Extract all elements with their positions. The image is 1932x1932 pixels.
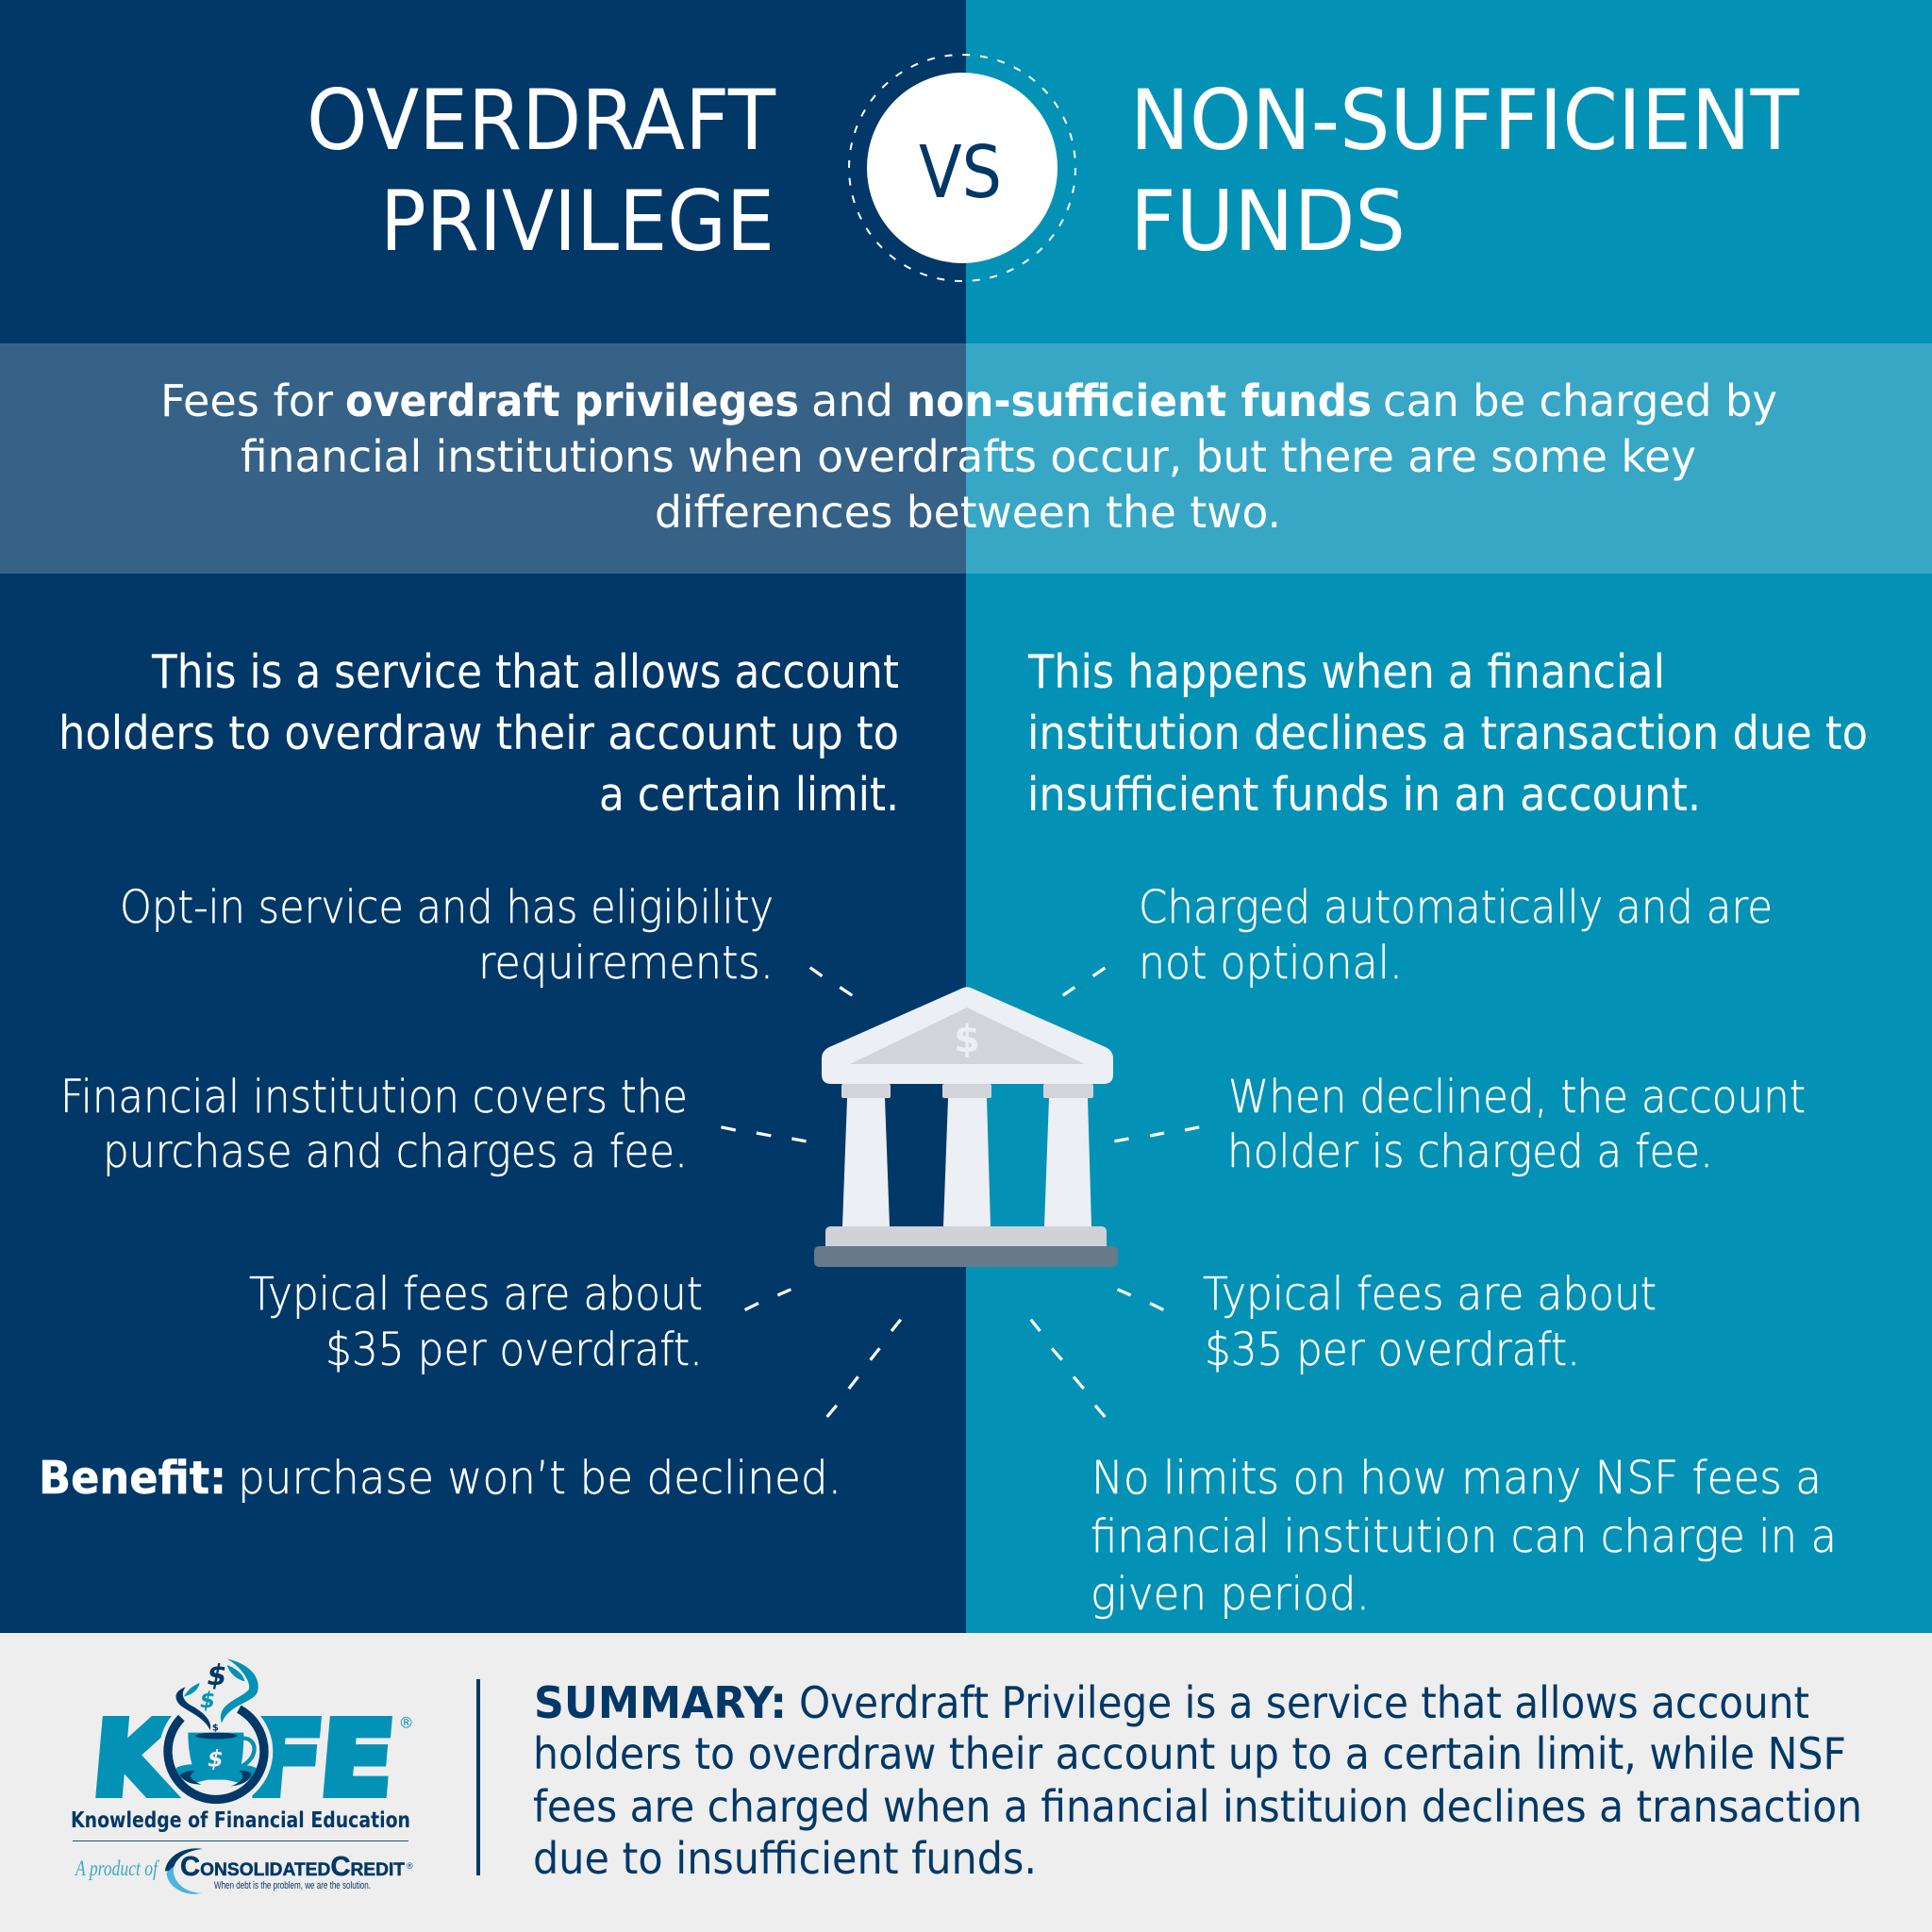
dashed connector lines: [721, 968, 1199, 1417]
summary text: Overdraft Privilege is a service that allows account: [799, 1677, 1809, 1728]
left point: typical fees: [249, 1268, 703, 1376]
logo: Consolidated Credit: CONSOLIDATEDCREDIT: [180, 1852, 405, 1882]
intro text: can be charged by: [1383, 375, 1777, 426]
left point: benefit: purchase won’t be declined.: [238, 1452, 841, 1505]
right point: declined fee: When declined, the account: [1228, 1071, 1806, 1124]
intro text: and: [811, 375, 893, 426]
panel: non-sufficient funds background: [966, 0, 1932, 1633]
right definition: insufficient funds in an account.: [1027, 768, 1701, 822]
intro text: differences between the two.: [655, 487, 1281, 538]
left point: typical fees: Typical fees are about: [249, 1268, 703, 1321]
intro text: overdraft privileges: [345, 375, 799, 426]
right point: typical fees: [1203, 1268, 1657, 1376]
VS badge: VS: [919, 131, 1002, 215]
icon: bank building: [814, 987, 1118, 1267]
right point: typical fees: Typical fees are about: [1203, 1268, 1657, 1321]
right definition: institution declines a transaction due to: [1027, 707, 1868, 760]
logo: slogan: When debt is the problem, we are the solution.: [214, 1880, 371, 1891]
logo: registered mark: ®: [407, 1861, 413, 1871]
left definition: [58, 645, 899, 822]
intro text: financial institutions when overdrafts occur, but there are some key: [241, 431, 1696, 482]
left point: covers the purchase: [60, 1071, 688, 1178]
left point: benefit: Benefit:: [39, 1452, 226, 1505]
intro band: [0, 343, 1932, 574]
icon: bank building: $: [954, 1018, 980, 1061]
panel: overdraft privilege background: [0, 0, 966, 1633]
logo coffee cup: $: [200, 1687, 215, 1713]
right point: declined fee: holder is charged a fee.: [1227, 1125, 1713, 1178]
logo letters: [88, 1699, 414, 1819]
logo coffee cup: $: [208, 1745, 224, 1772]
logo crescent: [165, 1848, 203, 1894]
right point: automatic: not optional.: [1139, 937, 1403, 990]
logo coffee cup: $: [212, 1723, 219, 1733]
left point: covers the purchase: purchase and charges a fee.: [103, 1125, 688, 1178]
heading: overdraft privilege: PRIVILEGE: [380, 173, 774, 270]
panel: footer: [0, 1633, 1932, 1932]
logo coffee cup: [159, 1658, 273, 1808]
summary text: SUMMARY:: [534, 1677, 787, 1728]
left definition: This is a service that allows account: [151, 645, 899, 699]
left point: opt-in: [120, 881, 774, 990]
right point: no limits: [1091, 1452, 1837, 1621]
left point: opt-in: Opt-in service and has eligibility: [120, 881, 774, 934]
right point: automatic: [1139, 881, 1773, 990]
logo: a product of: A product of: [74, 1857, 160, 1880]
logo letters: E: [315, 1701, 399, 1819]
logo: KOFE: [71, 1658, 414, 1894]
right point: no limits: given period.: [1091, 1568, 1370, 1621]
heading: non-sufficient funds: FUNDS: [1130, 173, 1406, 270]
left point: covers the purchase: Financial institution covers the: [60, 1071, 688, 1124]
right point: declined fee: [1227, 1071, 1806, 1178]
heading: non-sufficient funds: NON-SUFFICIENT: [1130, 72, 1800, 169]
logo letters: K: [88, 1699, 181, 1819]
footer divider: [476, 1679, 480, 1875]
logo letters: ®: [399, 1714, 414, 1732]
right definition: [1027, 645, 1868, 822]
heading: non-sufficient funds: [1130, 72, 1800, 270]
logo letters: F: [244, 1701, 328, 1819]
logo tagline: Knowledge of Financial Education: [71, 1808, 410, 1833]
left definition: holders to overdraw their account up to: [58, 707, 899, 760]
heading: overdraft privilege: OVERDRAFT: [307, 72, 776, 169]
VS badge: [849, 55, 1075, 281]
intro text: [160, 375, 1777, 538]
summary text: holders to overdraw their account up to a certain limit, while NSF: [533, 1728, 1846, 1779]
right definition: This happens when a financial: [1027, 645, 1665, 699]
left point: typical fees: $35 per overdraft.: [325, 1324, 703, 1376]
left point: opt-in: requirements.: [478, 937, 774, 990]
intro text: Fees for: [160, 375, 334, 426]
left definition: a certain limit.: [599, 768, 899, 822]
intro text: non-sufficient funds: [907, 375, 1372, 426]
right point: automatic: Charged automatically and are: [1139, 881, 1773, 934]
right point: typical fees: $35 per overdraft.: [1205, 1324, 1580, 1376]
summary text: [533, 1677, 1862, 1884]
right point: no limits: No limits on how many NSF fees a: [1091, 1452, 1822, 1505]
logo coffee cup: $: [208, 1659, 226, 1692]
right point: no limits: financial institution can charge in a: [1091, 1510, 1837, 1563]
summary text: due to insufficient funds.: [533, 1833, 1037, 1884]
heading: overdraft privilege: [307, 72, 776, 270]
